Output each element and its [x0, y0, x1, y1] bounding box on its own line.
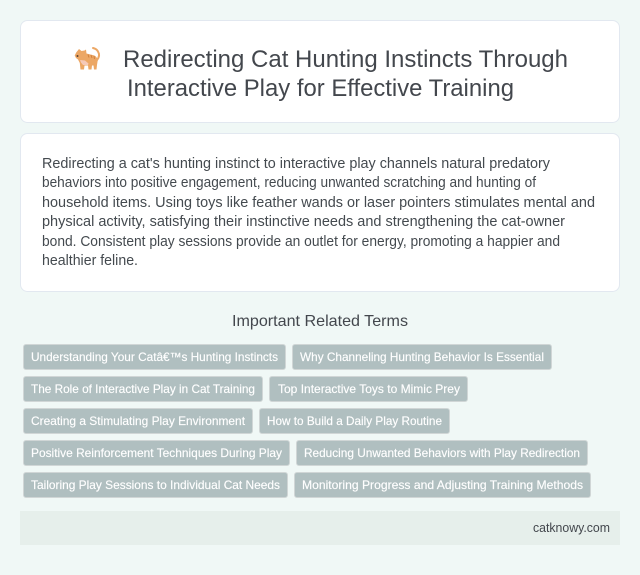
tag: Positive Reinforcement Techniques During Play [31, 446, 282, 460]
panel: summary text: Redirecting a cat's hunting instinct to interactive play channels natural predatory [42, 156, 551, 172]
panel: summary text: behaviors into positive engagement, reducing unwanted scratching and hunting of [42, 175, 537, 191]
tag: How to Build a Daily Play Routine [267, 414, 442, 428]
panel: title card [20, 20, 620, 122]
panel: summary text: household items. Using toys like feather wands or laser pointers stimulates mental and [42, 195, 595, 211]
tag [24, 440, 290, 466]
icon: cat [75, 48, 99, 70]
tag: Creating a Stimulating Play Environment [31, 414, 246, 428]
tags: related terms [24, 344, 590, 498]
footer [20, 511, 620, 545]
title: Interactive Play for Effective Training [127, 75, 514, 102]
tag: Top Interactive Toys to Mimic Prey [278, 382, 460, 396]
tag: Understanding Your Catâ€™s Hunting Instincts [31, 350, 278, 364]
tag: The Role of Interactive Play in Cat Training [31, 382, 255, 396]
tag [24, 344, 286, 370]
tag [260, 408, 450, 434]
title: Redirecting Cat Hunting Instincts Through [123, 46, 568, 73]
panel: summary text [20, 134, 620, 292]
heading: related terms: Important Related Terms [232, 313, 408, 330]
tag: Reducing Unwanted Behaviors with Play Redirection [304, 446, 580, 460]
tag [292, 344, 552, 370]
footer: catknowy.com [533, 520, 610, 535]
tag [294, 472, 590, 498]
panel: summary text: healthier feline. [42, 253, 138, 269]
tag [24, 376, 262, 402]
tag: Tailoring Play Sessions to Individual Cat Needs [31, 478, 280, 492]
tag [24, 408, 252, 434]
tag [24, 472, 288, 498]
tag: Why Channeling Hunting Behavior Is Essential [300, 350, 544, 364]
title [123, 46, 568, 102]
tag [296, 440, 588, 466]
tag [270, 376, 468, 402]
tag: Monitoring Progress and Adjusting Training Methods [302, 478, 583, 492]
panel: summary text: bond. Consistent play sessions provide an outlet for energy, promoting a happier and [42, 234, 560, 250]
panel: summary text: physical activity, satisfying their instinctive needs and strengthening the cat-owner [42, 214, 565, 230]
